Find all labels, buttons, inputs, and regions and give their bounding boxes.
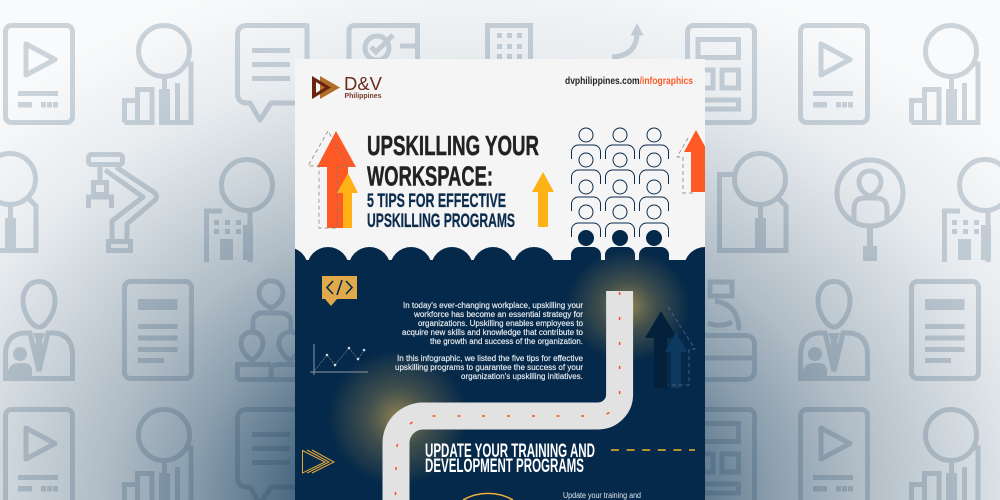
arrows: dark group right: [645, 307, 695, 388]
arrow: right orange with dashed outline: [677, 130, 708, 193]
large orange arrow: [317, 131, 356, 228]
icon: play document, row 4 left: [6, 410, 72, 500]
icon: play document, row 1 left: [6, 26, 72, 122]
icon: magnifier with bars, row 4 right: [912, 410, 978, 500]
icon: magnifier with bars, row 1 left: [124, 26, 191, 125]
heading line 2: DEVELOPMENT PROGRAMS: [425, 456, 584, 477]
arrow: middle yellow: [532, 172, 554, 227]
intro paragraph: [395, 301, 584, 381]
heading line 1: UPDATE YOUR TRAINING AND: [425, 441, 595, 462]
panel: header background: [295, 59, 705, 264]
icon: magnifier building, row 2 right: [944, 160, 1000, 262]
icon: layout document, row 1: [688, 26, 754, 122]
icon: line chart: [310, 344, 368, 375]
outlined shoulders: [572, 145, 668, 237]
title line 2: WORKSPACE:: [367, 160, 493, 192]
icon: magnifier with bars, row 4 left: [124, 410, 191, 500]
road path: [396, 291, 620, 500]
road glow upper: [570, 254, 685, 358]
intro line 1: In today's ever-changing workplace, upskilling your: [403, 301, 583, 310]
dashed arrow outline: [308, 131, 348, 228]
icon: building, row 1: [488, 26, 530, 60]
dashed yellow rule: [611, 449, 695, 451]
logo subtitle: Philippines: [344, 91, 382, 100]
title: [367, 130, 539, 232]
dashed outline: [677, 138, 693, 193]
icon: play document, row 1 right: [800, 26, 868, 122]
panel: navy body background: [295, 260, 705, 500]
icon: magnifier with bars, row 1 right: [912, 26, 978, 125]
title line 1: UPSKILLING YOUR: [367, 130, 539, 161]
section body text: Update your training and: [563, 491, 641, 500]
icon: person magnifier, row 2: [837, 160, 903, 261]
intro line 5: the growth and success of the organization.: [430, 337, 583, 346]
icon: speech bubble, row 4: [238, 410, 307, 500]
icon: presenter at desk, row 3: [702, 282, 754, 380]
audience of people icons: [571, 128, 669, 264]
intro line 8: organization's upskilling initiatives.: [461, 372, 583, 381]
logo wordmark: D&V: [344, 73, 383, 94]
intro line 3: organizations. Upskilling enables employees to: [418, 319, 584, 328]
road glow lower: [334, 355, 462, 480]
intro line 6: In this infographic, we listed the five tips for effective: [397, 354, 584, 363]
icon: group of people, row 3: [238, 281, 301, 380]
icon: checklist, row 1: [349, 26, 418, 60]
dashed outline: [668, 307, 695, 385]
icon: document, row 3 left: [124, 282, 192, 378]
dark arrow: [645, 311, 677, 388]
icon: chevron triangle: [302, 450, 334, 473]
section icon arc: [463, 493, 513, 500]
road surface: [396, 291, 620, 500]
subtitle line 2: UPSKILLING PROGRAMS: [367, 210, 515, 232]
icon: person, row 3 right: [800, 282, 868, 381]
road centre dashes: [396, 292, 620, 495]
icon: magnifier document, row 2 right: [720, 154, 786, 250]
icon: person, row 3 left: [6, 282, 72, 381]
infographic poster panel: [295, 59, 705, 500]
intro line 2: workforce has become an essential strategy for: [413, 310, 583, 319]
yellow arrow: [337, 173, 358, 228]
arrows: left group: [308, 131, 358, 228]
outlined heads: [579, 128, 661, 219]
section heading: [425, 441, 595, 477]
logo: [312, 76, 382, 100]
solid front row: [571, 230, 669, 260]
icon: magnifier building, row 2 left: [206, 160, 272, 262]
orange arrow: [684, 130, 705, 192]
icon: speech bubble, row 1: [238, 26, 307, 120]
website url: dvphilippines.com/infographics: [565, 75, 693, 87]
wave scallops: [295, 247, 705, 260]
blue arrow: [665, 332, 687, 388]
intro line 7: upskilling programs to guarantee the success of your: [395, 363, 583, 372]
icon: layout document, row 4: [688, 410, 754, 500]
icon: play document, row 4 right: [800, 410, 868, 500]
logo mark: [312, 76, 340, 99]
icon: magnifier document, row 2 left: [0, 154, 36, 250]
icon: rising arrow, row 1: [612, 23, 644, 57]
icon: code speech bubble: [322, 276, 357, 306]
subtitle line 1: 5 TIPS FOR EFFECTIVE: [367, 190, 506, 212]
icon: robot arm, row 2: [88, 154, 156, 250]
intro line 4: acquire new skills and knowledge that contribute to: [402, 328, 584, 337]
icon: document, row 3 right: [912, 282, 978, 378]
